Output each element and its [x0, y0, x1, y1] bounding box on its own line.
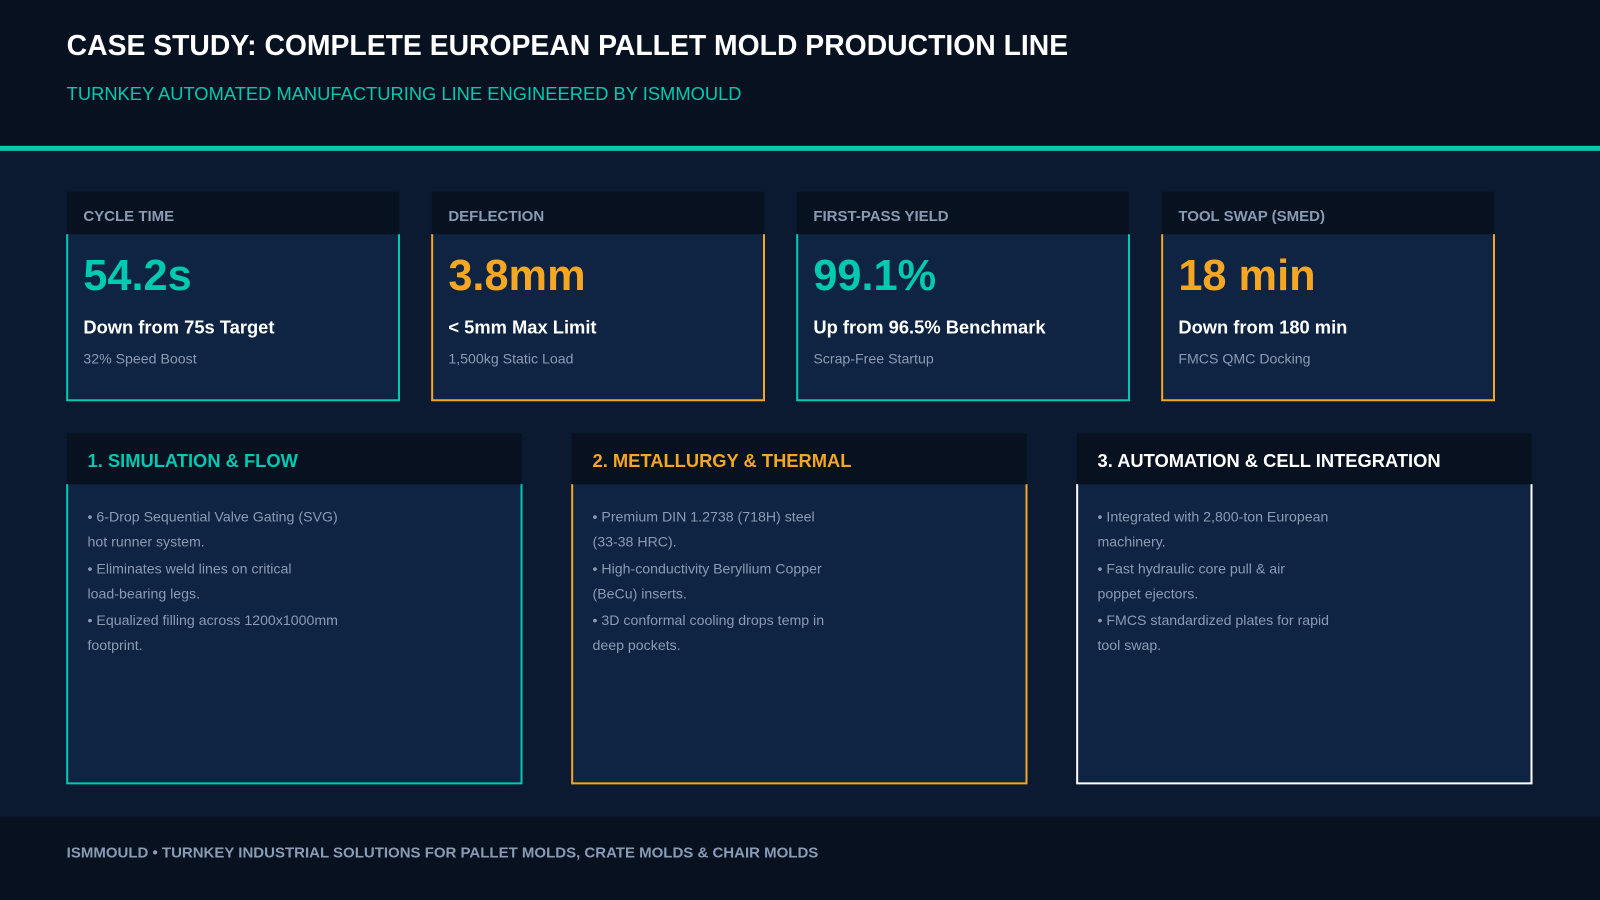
- panel: KPI first-pass yield: FIRST-PASS YIELD: [813, 208, 949, 225]
- panel: KPI first-pass yield: [797, 192, 1129, 400]
- panel: metallurgy and thermal: [572, 433, 1027, 783]
- footer: ISMMOULD • TURNKEY INDUSTRIAL SOLUTIONS FOR PALLET MOLDS, CRATE MOLDS & CHAIR MOLDS: [67, 845, 818, 862]
- panel: KPI cycle time: Down from 75s Target: [83, 316, 274, 337]
- panel: KPI tool swap: TOOL SWAP (SMED): [1178, 208, 1325, 225]
- panel: KPI tool swap: FMCS QMC Docking: [1178, 351, 1310, 367]
- panel: KPI first-pass yield: Up from 96.5% Benchmark: [813, 316, 1046, 337]
- panel: metallurgy and thermal: • 3D conformal cooling drops temp in: [592, 613, 824, 629]
- panel: automation and cell integration: poppet ejectors.: [1098, 586, 1198, 602]
- footer: [0, 817, 1600, 900]
- panel: KPI deflection: [432, 192, 764, 400]
- title: CASE STUDY: COMPLETE EUROPEAN PALLET MOLD PRODUCTION LINE: [67, 30, 1068, 62]
- panel: KPI cycle time: 32% Speed Boost: [83, 351, 197, 367]
- panel: KPI deflection: 1,500kg Static Load: [448, 351, 573, 367]
- panel: metallurgy and thermal: • Premium DIN 1.2738 (718H) steel: [592, 510, 815, 526]
- panel: KPI deflection: < 5mm Max Limit: [448, 316, 597, 337]
- panel: metallurgy and thermal: deep pockets.: [592, 638, 681, 654]
- panel: KPI first-pass yield: Scrap-Free Startup: [813, 351, 934, 367]
- panel: KPI cycle time: [67, 192, 399, 400]
- panel: metallurgy and thermal: (BeCu) inserts.: [592, 586, 687, 602]
- panel: automation and cell integration: 3. AUTOMATION & CELL INTEGRATION: [1098, 450, 1441, 471]
- panel: KPI tool swap: 18 min: [1178, 252, 1316, 300]
- panel: KPI deflection: DEFLECTION: [448, 208, 544, 225]
- panel: simulation and flow: load-bearing legs.: [88, 586, 200, 602]
- panel: simulation and flow: hot runner system.: [88, 535, 205, 551]
- panel: simulation and flow: • 6-Drop Sequential Valve Gating (SVG): [88, 510, 338, 526]
- panel: KPI tool swap: [1162, 192, 1494, 400]
- panel: KPI cycle time: 54.2s: [83, 252, 192, 300]
- panel: simulation and flow: [67, 433, 522, 783]
- panel: simulation and flow: footprint.: [88, 638, 143, 654]
- panel: KPI first-pass yield: 99.1%: [813, 252, 936, 300]
- panel: simulation and flow: 1. SIMULATION & FLOW: [88, 450, 299, 471]
- panel: simulation and flow: • Equalized filling across 1200x1000mm: [88, 613, 338, 629]
- panel: automation and cell integration: • Fast hydraulic core pull & air: [1098, 561, 1285, 577]
- panel: automation and cell integration: • FMCS standardized plates for rapid: [1098, 613, 1329, 629]
- panel: automation and cell integration: [1077, 433, 1532, 783]
- panel: KPI tool swap: Down from 180 min: [1178, 316, 1347, 337]
- panel: simulation and flow: • Eliminates weld lines on critical: [88, 561, 292, 577]
- header band: [0, 0, 1600, 151]
- subtitle: TURNKEY AUTOMATED MANUFACTURING LINE ENGINEERED BY ISMMOULD: [67, 83, 742, 104]
- panel: KPI cycle time: CYCLE TIME: [83, 208, 174, 225]
- panel: automation and cell integration: machinery.: [1098, 535, 1166, 551]
- panel: metallurgy and thermal: (33-38 HRC).: [592, 535, 677, 551]
- panel: metallurgy and thermal: 2. METALLURGY & THERMAL: [592, 450, 851, 471]
- panel: KPI deflection: 3.8mm: [448, 252, 586, 300]
- panel: automation and cell integration: tool swap.: [1098, 638, 1161, 654]
- panel: metallurgy and thermal: • High-conductivity Beryllium Copper: [592, 561, 822, 577]
- panel: automation and cell integration: • Integrated with 2,800-ton European: [1098, 510, 1328, 526]
